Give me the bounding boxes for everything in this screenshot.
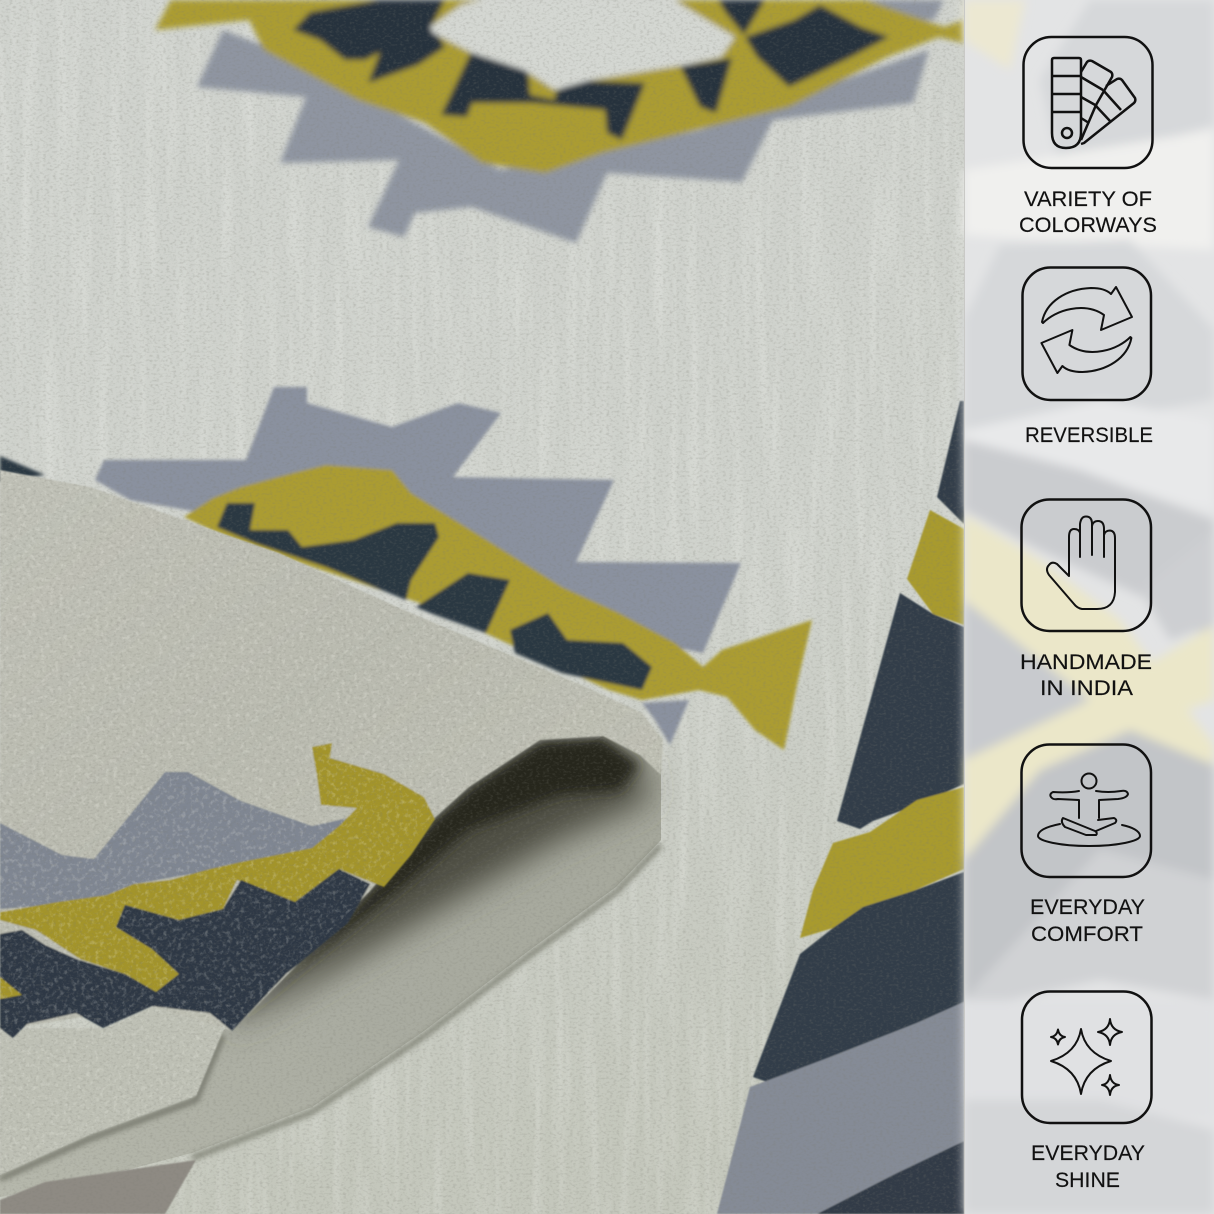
icon: reversible arrows xyxy=(1022,268,1151,400)
label: handmade in india: HANDMADE xyxy=(1020,651,1152,674)
top motif xyxy=(155,0,964,243)
icon: colour fan deck xyxy=(1024,37,1152,168)
photo: folded kilim rug xyxy=(0,0,964,1214)
middle motif xyxy=(0,387,812,750)
sidebar: faded blurred backdrop xyxy=(964,0,1214,1214)
icon: sparkles xyxy=(1022,992,1152,1123)
label: everyday comfort: COMFORT xyxy=(1031,923,1143,946)
label: handmade in india: IN INDIA xyxy=(1040,677,1133,700)
soft shading of fold interior xyxy=(223,740,650,1035)
icon: open hand xyxy=(1022,500,1151,631)
label: everyday comfort xyxy=(1030,896,1145,946)
label: variety of colorways: VARIETY OF xyxy=(1024,188,1152,211)
feature: handmade in india xyxy=(1020,500,1152,700)
label: everyday shine: EVERYDAY xyxy=(1031,1142,1145,1165)
label: everyday shine: SHINE xyxy=(1055,1169,1120,1192)
label: everyday comfort: EVERYDAY xyxy=(1030,896,1145,919)
label: variety of colorways xyxy=(1019,188,1157,237)
feature: everyday shine xyxy=(1022,992,1152,1192)
label: everyday shine xyxy=(1031,1142,1145,1192)
feature: everyday comfort xyxy=(1022,744,1151,946)
rug field xyxy=(0,0,964,1214)
woven streaks xyxy=(0,0,964,1214)
dark core of fold interior xyxy=(232,736,640,1031)
feature: reversible xyxy=(1022,268,1153,447)
label: reversible: REVERSIBLE xyxy=(1025,424,1153,447)
icon: meditating figure xyxy=(1022,744,1151,877)
second fold layer xyxy=(0,736,661,1197)
lower lip of the flap xyxy=(0,1006,223,1175)
woven texture xyxy=(0,0,964,1214)
flap weave highlights xyxy=(0,460,670,1180)
label: variety of colorways: COLORWAYS xyxy=(1019,214,1157,237)
crease shadow below second layer xyxy=(192,845,661,1158)
feature: variety of colorways xyxy=(1019,37,1157,237)
folded flap xyxy=(0,470,663,1038)
label: handmade in india xyxy=(1020,651,1152,700)
brown fringe strip xyxy=(0,1160,196,1214)
right border stripes xyxy=(717,401,964,1214)
crease shadow under flap lip xyxy=(0,1035,223,1179)
